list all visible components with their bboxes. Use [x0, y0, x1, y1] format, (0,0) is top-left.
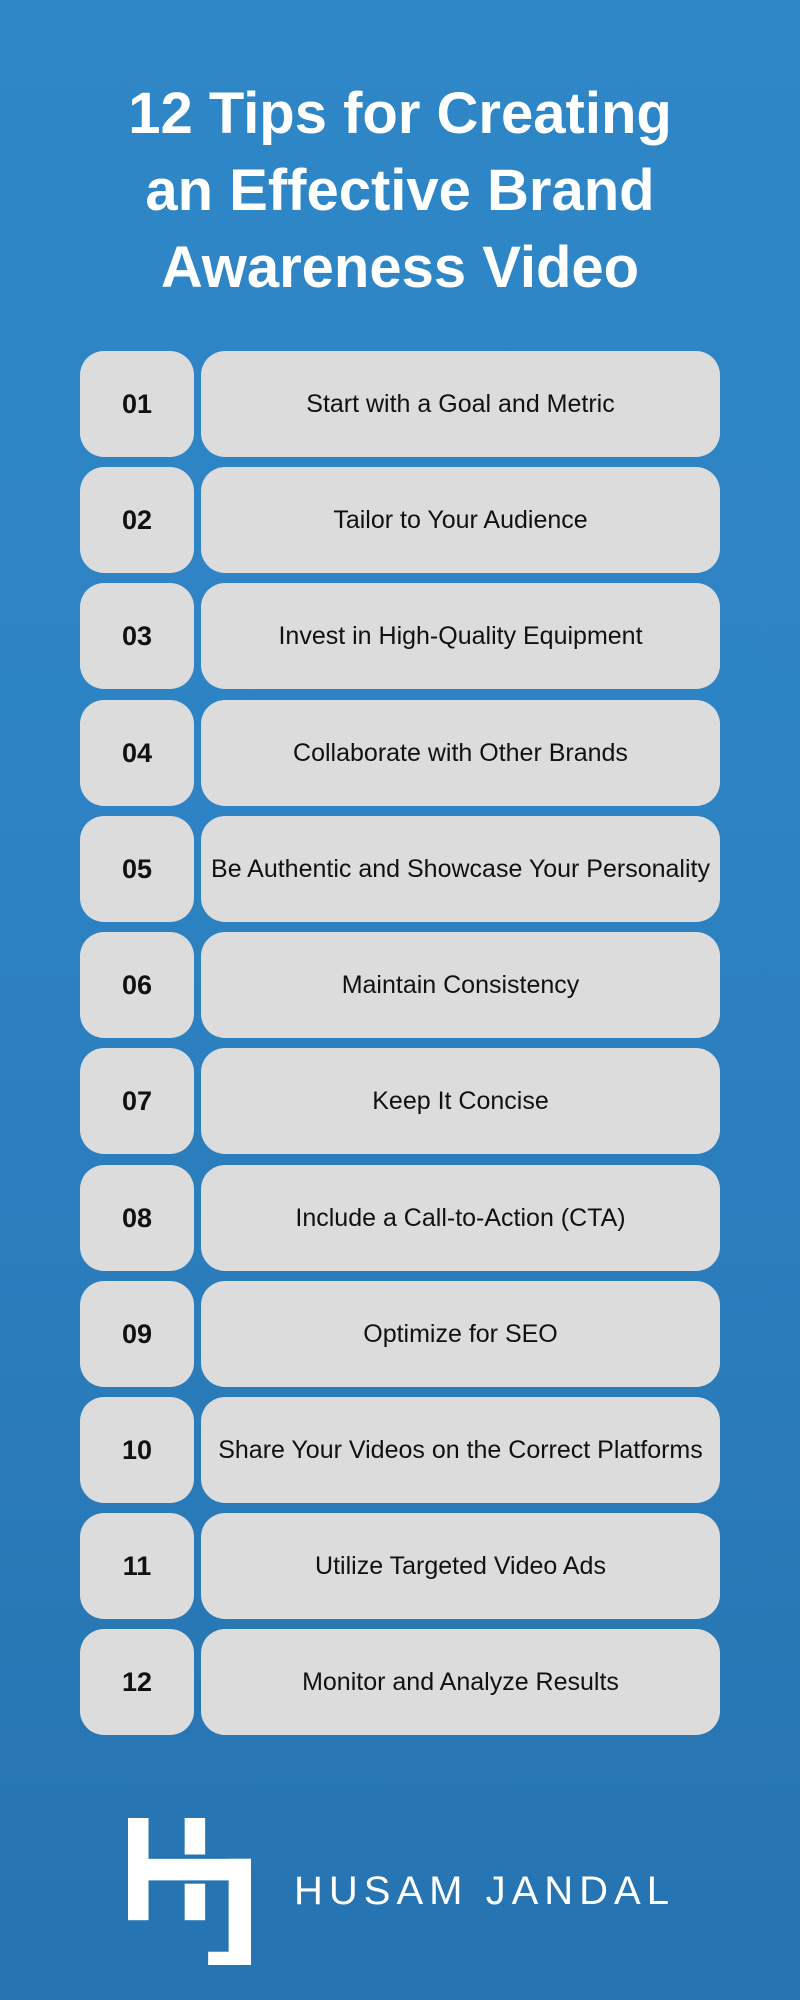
- row 09: 09: [122, 1318, 152, 1348]
- row 03: Invest in High-Quality Equipment: [278, 622, 643, 650]
- logo: [128, 1818, 675, 1965]
- icon: HJ mark: [128, 1818, 251, 1965]
- row 02: 02: [122, 504, 152, 534]
- row 10: 10: [122, 1434, 152, 1464]
- brand name: HUSAM JANDAL: [294, 1869, 675, 1913]
- row 01: [80, 351, 720, 457]
- row 12: [80, 1629, 720, 1735]
- row 04: [80, 700, 720, 806]
- row 08: Include a Call-to-Action (CTA): [295, 1204, 626, 1232]
- row 03: [80, 583, 720, 689]
- row 06: 06: [122, 970, 152, 1000]
- row 01: Start with a Goal and Metric: [306, 390, 615, 418]
- row 08: [80, 1165, 720, 1271]
- row 07: Keep It Concise: [372, 1086, 549, 1114]
- row 06: [80, 932, 720, 1038]
- row 09: [80, 1281, 720, 1387]
- row 12: Monitor and Analyze Results: [302, 1668, 619, 1696]
- row 06: Maintain Consistency: [342, 970, 579, 998]
- title: an Effective Brand: [145, 158, 655, 223]
- row 03: 03: [122, 620, 152, 650]
- row 05: [80, 816, 720, 922]
- title: 12 Tips for Creating: [128, 81, 672, 146]
- row 08: 08: [122, 1202, 152, 1232]
- row 01: 01: [122, 388, 152, 418]
- row 04: Collaborate with Other Brands: [293, 738, 628, 766]
- row 11: 11: [123, 1550, 151, 1580]
- row 02: [80, 467, 720, 573]
- row 09: Optimize for SEO: [363, 1320, 558, 1348]
- row 02: Tailor to Your Audience: [333, 506, 588, 534]
- row 10: [80, 1397, 720, 1503]
- title: [128, 81, 672, 300]
- title: Awareness Video: [161, 235, 639, 300]
- row 10: Share Your Videos on the Correct Platforms: [218, 1436, 703, 1464]
- row 11: Utilize Targeted Video Ads: [315, 1552, 606, 1580]
- row 07: 07: [122, 1086, 152, 1116]
- row 11: [80, 1513, 720, 1619]
- row 05: Be Authentic and Showcase Your Personality: [211, 854, 710, 882]
- row 07: [80, 1048, 720, 1154]
- row 05: 05: [122, 854, 152, 884]
- row 04: 04: [122, 738, 152, 768]
- row 12: 12: [122, 1666, 152, 1696]
